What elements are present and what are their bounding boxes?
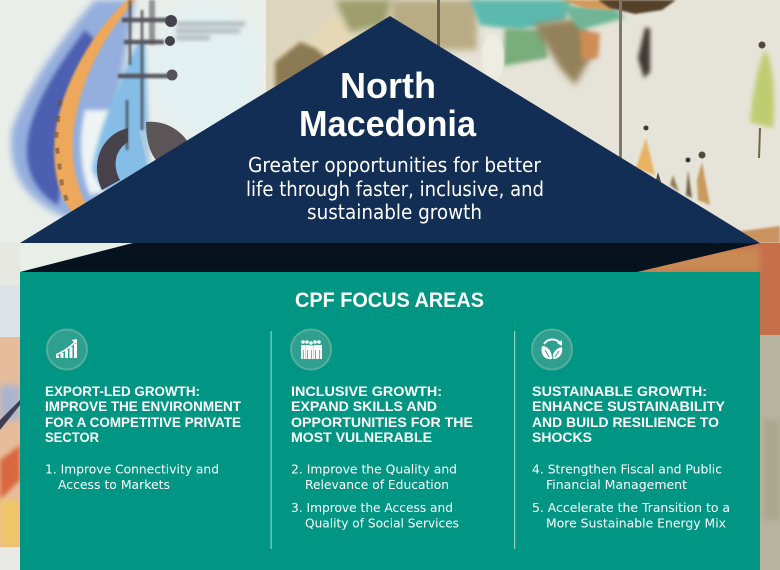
column: export-led growth [45,330,241,492]
heading: sustainable growth: AND BUILD RESILIENCE TO [532,414,719,430]
heading: export-led growth: SECTOR [45,429,99,445]
triangle roof panel [20,16,760,243]
list items 4 and 5: More Sustainable Energy Mix [546,516,726,530]
icon: group of people [291,330,331,370]
list items 4 and 5 [532,462,730,530]
icon: rising bar chart [47,330,87,370]
list items 4 and 5: 4. Strengthen Fiscal and Public [532,462,722,476]
painting panel: left blue and orange arc [0,0,266,272]
subtitle text [246,153,544,224]
small orange figures [636,138,655,175]
subtitle text: Greater opportunities for better [248,153,542,177]
heading: CPF FOCUS AREAS [295,289,484,312]
heading: inclusive growth [291,383,473,445]
heading: export-led growth [45,383,241,445]
heading: sustainable growth: SHOCKS [532,429,592,445]
heading: sustainable growth: SUSTAINABLE GROWTH: [532,383,707,399]
list item 1 [45,462,219,492]
title: Macedonia [299,103,477,144]
icon: leaf with cycle arrow [532,330,572,370]
heading: sustainable growth [532,383,726,445]
subtitle text: sustainable growth [307,200,482,224]
list items 2 and 3 [291,462,459,530]
dark arc shapes [97,128,128,190]
list items 2 and 3: 2. Improve the Quality and [291,462,457,476]
heading: inclusive growth: OPPORTUNITIES FOR THE [291,414,473,430]
list items 2 and 3: Quality of Social Services [305,516,459,530]
column: inclusive growth [291,330,473,530]
list items 2 and 3: Relevance of Education [305,477,449,492]
heading: sustainable growth: ENHANCE SUSTAINABILITY [532,398,726,414]
title [299,65,477,144]
painting panel: right strip [620,243,780,570]
heading: inclusive growth: INCLUSIVE GROWTH: [291,383,442,399]
painting panel: left strip [0,243,20,570]
column: sustainable growth [532,330,730,530]
list item 1: Access to Markets [58,477,170,492]
green figure [750,50,774,128]
list items 2 and 3: 3. Improve the Access and [291,500,453,515]
subtitle text: life through faster, inclusive, and [246,177,544,201]
heading: inclusive growth: MOST VULNERABLE [291,429,432,445]
shadow band under triangle [20,243,760,272]
panel: CPF focus areas [20,272,760,570]
heading: inclusive growth: EXPAND SKILLS AND [291,398,437,414]
heading: export-led growth: IMPROVE THE ENVIRONMENT [45,398,241,414]
list items 4 and 5: 5. Accelerate the Transition to a [532,500,730,515]
title: North [340,65,436,106]
dark crosshatch strokes [118,0,170,150]
painting panel: upper middle and right figures [266,0,780,243]
list items 4 and 5: Financial Management [546,477,687,492]
heading: export-led growth: FOR A COMPETITIVE PRIVATE [45,414,241,430]
list item 1: 1. Improve Connectivity and [45,462,219,476]
heading: export-led growth: EXPORT-LED GROWTH: [45,383,200,399]
